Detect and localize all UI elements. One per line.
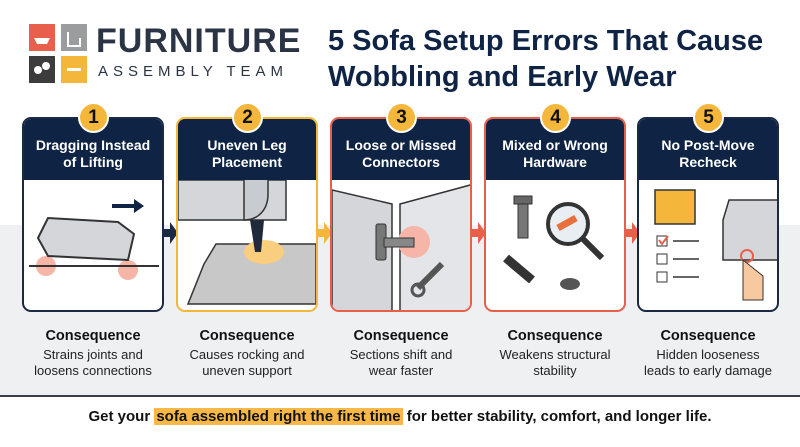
icon: connector bolt [332, 184, 470, 310]
number 5: 5 [703, 107, 714, 128]
icon: logo tiles [29, 24, 87, 83]
panel: 3 [330, 117, 472, 312]
arrow 1-2 [164, 222, 176, 244]
consequence 5: leads to early damage [644, 363, 772, 378]
number 4 [540, 102, 571, 133]
title: 5 Sofa Setup Errors That Cause [328, 25, 763, 57]
panel: 2: Uneven Leg [207, 137, 287, 153]
arrow 3-4 [472, 222, 484, 244]
consequence 4 [499, 328, 611, 378]
panel: 1: Dragging Instead [36, 137, 150, 153]
number 5 [693, 102, 724, 133]
consequence 5: Hidden looseness [656, 347, 760, 362]
consequence 3: Consequence [353, 328, 449, 344]
logo: ASSEMBLY TEAM [98, 63, 288, 80]
panel: 5: No Post-Move [661, 137, 755, 153]
number 1: 1 [88, 107, 99, 128]
consequence 3 [350, 328, 452, 378]
icon: dragged sofa [29, 199, 159, 280]
icon: bolts and magnifier [503, 196, 604, 290]
panel: 2 [176, 117, 318, 312]
panel: 5: Recheck [679, 154, 737, 170]
panel: 3: Loose or Missed [346, 137, 456, 153]
consequence 2: Consequence [199, 328, 295, 344]
number 3: 3 [396, 107, 407, 128]
icon: leg on rug [178, 180, 316, 305]
panel: 1 [22, 117, 164, 312]
consequence 2: Causes rocking and [190, 347, 304, 362]
panel: 3: Connectors [362, 154, 440, 170]
number 3 [386, 102, 417, 133]
panel: 4: Hardware [523, 154, 587, 170]
brand name: FURNITURE [96, 22, 301, 60]
consequence 1 [34, 328, 152, 378]
consequence 3: Sections shift and [350, 347, 452, 362]
consequence 4: Weakens structural [499, 347, 611, 362]
consequence 4: stability [533, 363, 577, 378]
consequence 1: Strains joints and [43, 347, 143, 362]
panel: 4: Mixed or Wrong [502, 137, 608, 153]
number 2 [232, 102, 263, 133]
panel: 2: Placement [212, 154, 282, 170]
arrow 4-5 [626, 222, 637, 244]
title [328, 25, 763, 93]
consequence 1: Consequence [45, 328, 141, 344]
panel: 4 [484, 117, 626, 312]
consequence 5: Consequence [660, 328, 756, 344]
consequence 2 [190, 328, 304, 378]
consequence 4: Consequence [507, 328, 603, 344]
title: Wobbling and Early Wear [328, 61, 677, 93]
logo [29, 22, 301, 83]
arrow 2-3 [318, 222, 330, 244]
panel: 5 [637, 117, 779, 312]
footer tagline: Get your sofa assembled right the first time for better stability, comfort, and longer life. [88, 408, 712, 425]
consequence 5 [644, 328, 772, 378]
consequence 1: loosens connections [34, 363, 152, 378]
consequence 3: wear faster [369, 363, 433, 378]
number 1 [78, 102, 109, 133]
icon: box checklist sofa [654, 189, 777, 300]
number 2: 2 [242, 107, 253, 128]
background band [0, 225, 800, 397]
number 4: 4 [550, 107, 561, 128]
consequence 2: uneven support [202, 363, 292, 378]
panel: 1: of Lifting [63, 154, 123, 170]
